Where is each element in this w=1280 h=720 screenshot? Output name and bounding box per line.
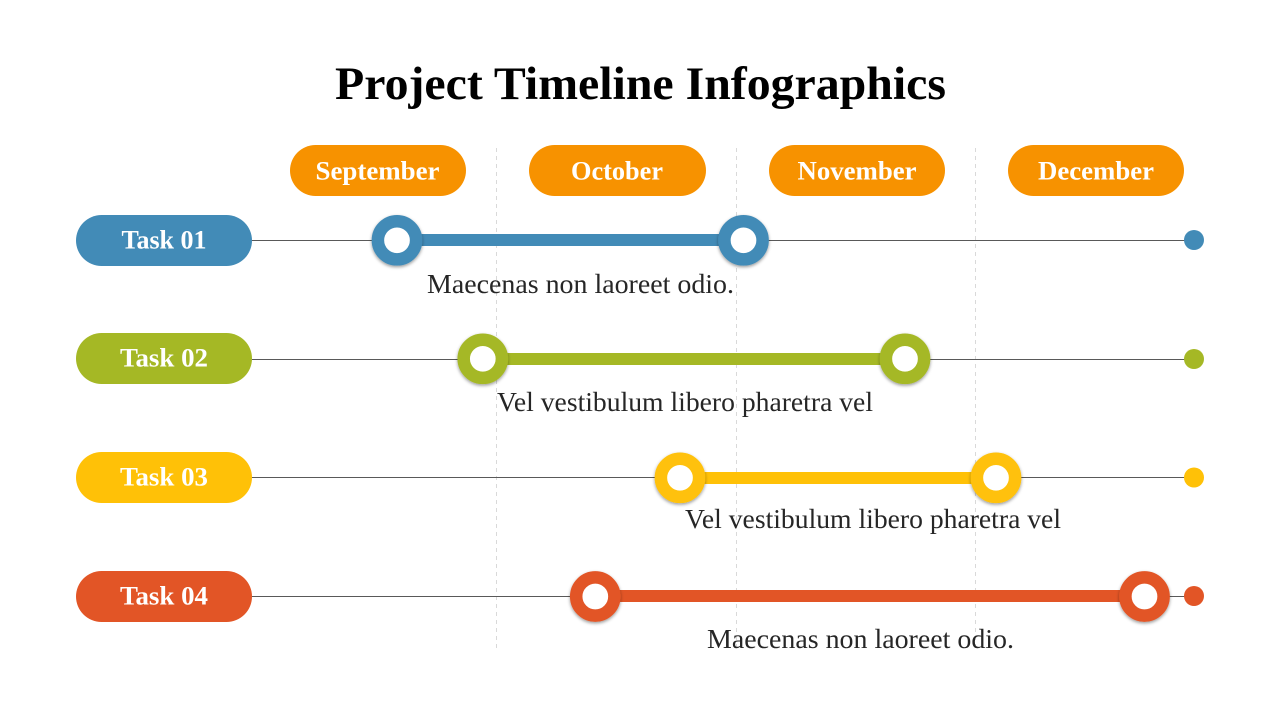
month: December	[1008, 145, 1184, 196]
start marker: Task 02	[464, 340, 502, 378]
task label: Task 01	[76, 215, 252, 266]
end dot: Task 03	[1184, 468, 1204, 488]
month: September: September	[316, 156, 440, 186]
task label: Task 02	[76, 333, 252, 384]
start marker: Task 01	[378, 221, 416, 259]
row: Task 02	[76, 333, 1204, 417]
title: Project Timeline Infographics	[335, 58, 946, 110]
task label: Task 01: Task 01	[122, 226, 206, 254]
start marker: Task 04	[576, 577, 614, 616]
end marker: Task 03	[977, 459, 1015, 497]
month headers	[290, 145, 1184, 196]
description: Task 04: Maecenas non laoreet odio.	[707, 624, 1014, 654]
row: Task 03	[76, 452, 1204, 534]
duration bar: Task 04	[595, 590, 1144, 602]
row: Task 01	[76, 215, 1204, 299]
start marker: Task 03	[661, 459, 699, 497]
task label: Task 03: Task 03	[120, 462, 208, 492]
end marker: Task 04	[1125, 577, 1164, 616]
end marker: Task 01	[724, 221, 763, 259]
month: October: October	[571, 156, 663, 186]
end dot: Task 02	[1184, 349, 1204, 369]
description: Task 01: Maecenas non laoreet odio.	[427, 269, 734, 299]
end dot: Task 04	[1184, 586, 1204, 606]
row: Task 04	[76, 571, 1204, 654]
description: Task 02: Vel vestibulum libero pharetra vel	[497, 387, 873, 417]
task label: Task 02: Task 02	[120, 344, 208, 372]
task label: Task 04	[76, 571, 252, 622]
task label: Task 03	[76, 452, 252, 503]
duration bar: Task 02	[483, 353, 905, 365]
task label: Task 04: Task 04	[120, 582, 208, 610]
duration bar: Task 01	[397, 234, 743, 246]
end dot: Task 01	[1184, 230, 1204, 250]
end marker: Task 02	[886, 340, 924, 378]
description: Task 03: Vel vestibulum libero pharetra vel	[685, 504, 1061, 534]
month: November: November	[798, 156, 916, 186]
month: December: December	[1038, 156, 1154, 186]
duration bar: Task 03	[680, 472, 996, 484]
month: October	[529, 145, 706, 196]
month: September	[290, 145, 466, 196]
month: November	[769, 145, 945, 196]
